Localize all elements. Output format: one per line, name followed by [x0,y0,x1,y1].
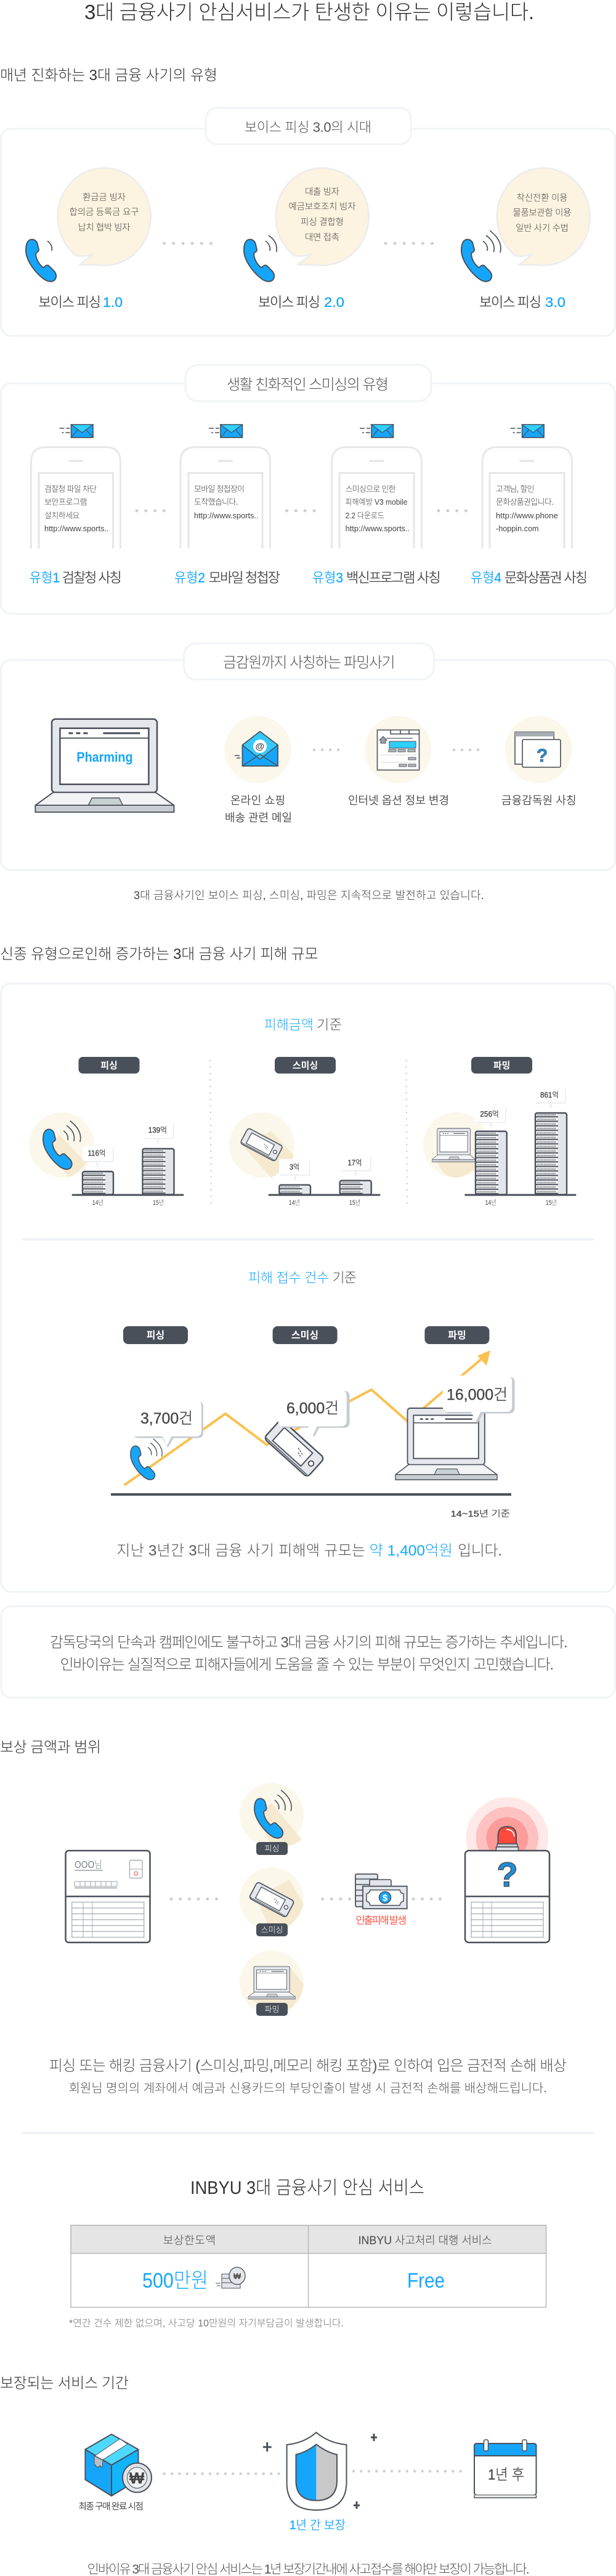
icon: box with coin [85,2434,152,2496]
icon: money [355,1874,407,1909]
phone mock 4: http://www.phone [496,511,558,520]
tag: phishing: 피싱 [147,1330,164,1341]
node: pharming [240,1950,304,2016]
label: type 2: 유형2 [174,570,205,585]
label: purchase completed: 최종 구매 완료 시점 [79,2501,144,2512]
caption: fraud evolving: 3대 금융사기인 보이스 피싱, 스미싱, 파밍은 지속적으로 발전하고 있습니다. [134,889,484,902]
summary sentence: 약 1,400억원 [370,1543,453,1559]
note: *연간 건수 제한 없으며, 사고당 10만원의 자기부담금이 발생합니다. [69,2318,344,2329]
panel: pharming [1,643,615,870]
callout: 3,700 [132,1401,203,1448]
phone mock 1 [31,447,121,548]
panel: smishing types [1,365,615,614]
speech bubble: phishing 1.0: 납치 협박 빙자 [78,222,131,233]
summary sentence: 입니다. [458,1543,502,1559]
label: type 2: 모바일 청첩장 [209,570,280,585]
dotted divider [210,1060,211,1208]
label: phishing 3.0: 보이스 피싱 [479,295,541,310]
speech bubble: phishing 3.0: 착신전환 이용 [516,193,568,203]
node: phishing [240,1783,304,1855]
label: one year warranty: 1년 간 보장 [290,2518,346,2532]
chart: phishing amount: 139억 [148,1126,167,1135]
heading: compensation scope: 보상 금액과 범위 [0,1739,101,1756]
speech bubble: phishing 2.0 [276,168,369,266]
subheading: count basis: 기준 [333,1270,357,1286]
table: service: 보상한도액 [163,2234,216,2246]
divider [22,2132,594,2134]
speech bubble: phishing 2.0: 예금보호조치 빙자 [288,202,356,212]
phone mock 4: 고객님, 할인 [496,484,535,494]
title: 3대 금융사기 안심서비스가 탄생한 이유는 이렇습니다. [84,1,534,23]
tag: pharming: 파밍 [493,1061,510,1071]
dotted connector [413,1897,441,1901]
chart: smishing amount: 3억 [290,1163,299,1172]
subheading: amount basis: 피해금액 [264,1017,314,1033]
icon: e-mail circle [224,716,291,783]
phone mock 3: http://www.sports.. [346,524,410,533]
chart: smishing amount: 14년 [289,1199,300,1207]
label: online shopping mail [225,794,292,824]
chart: pharming amount: 256억 [480,1110,499,1119]
phone mock 1: 보안프로그램 [44,497,87,507]
dotted connector [323,1897,350,1901]
chart: smishing amount: 17억 [347,1159,362,1167]
dotted connector [164,2472,285,2475]
callout: 16,000: 16,000건 [447,1387,508,1404]
label: phishing 1.0: 보이스 피싱 [38,295,101,310]
callout: 16,000 [443,1376,515,1424]
tag: smishing [275,1057,336,1074]
callout: 6,000: 6,000건 [286,1400,339,1417]
label: type 1: 유형1 [30,570,60,585]
tag: phishing [123,1326,188,1344]
dotted connector [171,1897,217,1901]
panel: commentary [1,1606,615,1697]
label: type 2 [174,570,280,585]
table: service: INBYU 사고처리 대행 서비스 [359,2234,492,2246]
speech bubble: phishing 2.0: 대출 빙자 [305,187,339,197]
callout: 6,000 [278,1390,350,1437]
illustration: laptop with Pharming [35,719,174,812]
table: service [71,2225,546,2307]
node: pharming: 파밍 [265,2005,279,2014]
subheading: amount basis: 기준 [317,1017,342,1033]
icon: phone 2 [244,235,277,282]
label: withdrawal damage: 인출피해 발생 [355,1915,407,1926]
tag: phishing: 피싱 [100,1061,118,1071]
heading: yearly evolving fraud types: 매년 진화하는 3대 금융 사기의 유형 [0,67,217,84]
subheading: amount basis [264,1017,342,1033]
phone mock 3 [331,447,421,548]
tag: smishing: 스미싱 [293,1061,318,1071]
text: compensation description: 피싱 또는 해킹 금융사기 (스미싱,파밍,메모리 해킹 포함)로 인하여 입은 금전적 손해 배상 [49,2058,567,2074]
label: internet options: 인터넷 옵션 정보 변경 [348,794,449,807]
icon: money: $ [383,1893,388,1903]
chart: phishing amount: 15년 [153,1199,164,1207]
illustration: laptop with Pharming: Pharming [76,749,133,765]
icon: coins: ₩ [233,2272,241,2281]
icon: mail 3 [360,425,393,438]
label: fss impersonation: 금융감독원 사칭 [501,794,577,807]
icon: laptop [395,1408,497,1480]
label: online shopping mail: 배송 관련 메일 [225,812,292,824]
document: account [65,1851,150,1942]
chart: smishing amount: 15년 [349,1199,360,1207]
chart: pharming amount: 15년 [546,1199,557,1207]
node: smishing: 스미싱 [261,1925,283,1934]
label: type 1: 검찰청 사칭 [62,570,122,585]
label: phishing 1.0: 1.0 [103,295,123,310]
panel tag: voice phishing era: 보이스 피싱 3.0의 시대 [245,120,371,135]
tag: smishing [273,1326,338,1344]
panel: voice phishing 3.0 [1,108,615,336]
label: phishing 2.0: 2.0 [324,295,344,310]
tag: pharming [424,1326,489,1344]
phone mock 4: -hoppin.com [496,524,538,533]
heading: service: INBYU 3대 금융사기 안심 서비스 [190,2178,424,2198]
dotted connector [354,2470,463,2472]
label: phishing 3.0: 3.0 [545,295,565,310]
label: type 4: 유형4 [471,570,501,585]
document: account: OOO님 [75,1859,102,1870]
panel tag: smishing [185,365,431,401]
chart: phishing amount: 116억 [87,1149,106,1157]
icon: phone [131,1439,162,1480]
heading: period: 보장되는 서비스 기간 [0,2375,129,2392]
dotted connector [454,748,479,751]
label: online shopping mail: 온라인 쇼핑 [230,794,285,807]
dotted connector [164,242,211,245]
summary sentence [116,1543,502,1559]
icon: calendar [474,2440,536,2498]
phone mock 2: 모바일 청첩장이 [194,484,245,494]
phone mock 2 [180,447,270,548]
panel tag: smishing: 생활 친화적인 스미싱의 유형 [227,377,389,393]
phone mock 1: http://www.sports.. [44,524,109,533]
tag: pharming: 파밍 [448,1330,466,1341]
speech bubble: phishing 1.0 [58,168,151,266]
dotted connector [439,509,466,512]
phone mock 2: http://www.sports.. [194,511,259,520]
node: smishing [240,1867,304,1936]
note: period: 14~15년 기준 [451,1509,510,1518]
icon: browser options circle [365,716,431,783]
phone mock 1: 설치하세요 [44,511,79,520]
phone mock 4 [482,447,572,548]
heading: damage scale: 신종 유형으로인해 증가하는 3대 금융 사기 피해 규모 [0,946,318,963]
baseline [111,1493,511,1496]
panel tag: pharming: 금감원까지 사칭하는 파밍사기 [223,654,395,671]
panel: damage charts [1,984,615,1592]
coin symbol: ₩ [129,2469,145,2487]
icon: coins [216,2267,245,2288]
chart: pharming amount: 861억 [540,1091,559,1099]
icon: e-mail circle: @ [256,741,264,752]
illustration: warranty period [79,2432,536,2532]
icon: mail 1 [59,425,93,438]
icon: question window circle [505,716,572,783]
table: service: 500만원 [142,2269,208,2293]
icon: phone 3 [461,230,501,282]
label: phishing 2.0: 보이스 피싱 [258,295,320,310]
chart: smishing amount [229,1112,379,1207]
phone mock 1: 검찰청 파일 차단 [44,484,97,494]
chart: pharming amount [423,1087,575,1207]
panel: commentary: 인바이유는 실질적으로 피해자들에게 도움을 줄 수 있는 부분이 무엇인지 고민했습니다. [60,1657,554,1673]
label: type 3: 백신프로그램 사칭 [346,570,441,585]
speech bubble: phishing 3.0 [497,168,590,266]
speech bubble: phishing 3.0: 물품보관함 이용 [513,208,572,218]
dotted connector [137,509,164,512]
icon: mail 4 [511,425,544,438]
speech bubble: phishing 2.0: 피싱 결합형 [301,217,344,227]
node: phishing: 피싱 [265,1844,279,1853]
speech bubble: phishing 1.0: 환급금 빙자 [83,192,126,203]
dotted connector [386,242,432,245]
phone mock 3: 피해예방 V3 mobile [346,497,407,507]
document: alert with question [465,1797,549,1942]
dotted connector [314,748,339,751]
plus marks [263,2434,377,2509]
phone mock 4: 문화상품권입니다. [496,497,554,507]
text: compensation description [49,2058,567,2095]
speech bubble: phishing 2.0: 대면 접촉 [305,232,339,243]
illustration: fraud flow [65,1783,549,2016]
table: service: Free [407,2269,445,2293]
panel tag: pharming [184,643,434,679]
icon: shield [287,2432,346,2510]
label: type 3: 유형3 [312,570,343,585]
phone mock 2: 도착했습니다. [194,497,238,507]
label: type 1 [30,570,122,585]
tag: phishing [79,1057,139,1074]
icon: mail 2 [209,425,243,438]
phone mock 3: 2.2 다운로드 [346,511,384,520]
panel tag: voice phishing era [206,108,411,144]
dotted connector [287,509,315,512]
phone mock 3: 스미싱으로 인한 [346,484,396,494]
rising trend arrow [124,1350,490,1485]
chart: pharming amount: 14년 [485,1199,496,1207]
summary sentence: 지난 3년간 3대 금융 사기 피해액 규모는 [116,1543,365,1559]
icon: calendar: 1년 후 [488,2467,524,2484]
icon: question window circle: ? [537,746,548,766]
divider [22,1238,594,1241]
label: type 4: 문화상품권 사칭 [505,570,588,585]
chart: phishing amount: 14년 [92,1199,103,1207]
chart: phishing amount [29,1112,183,1207]
tag: pharming [471,1057,532,1074]
document: alert with question: ? [496,1855,518,1894]
speech bubble: phishing 3.0: 일반 사기 수법 [516,223,569,234]
tag: smishing: 스미싱 [291,1330,318,1341]
speech bubble: phishing 1.0: 합의금 등록금 요구 [69,207,139,218]
callout: 3,700: 3,700건 [140,1410,193,1427]
icon: phone 1 [26,239,56,282]
text: compensation description: 회원님 명의의 계좌에서 예금과 신용카드의 부당인출이 발생 시 금전적 손해를 배상해드립니다. [69,2081,547,2095]
panel: commentary: 감독당국의 단속과 캠페인에도 불구하고 3대 금융 사기의 피해 규모는 증가하는 추세입니다. [50,1634,568,1651]
subheading: count basis: 피해 접수 건수 [248,1270,329,1286]
icon: mobile [264,1419,325,1477]
